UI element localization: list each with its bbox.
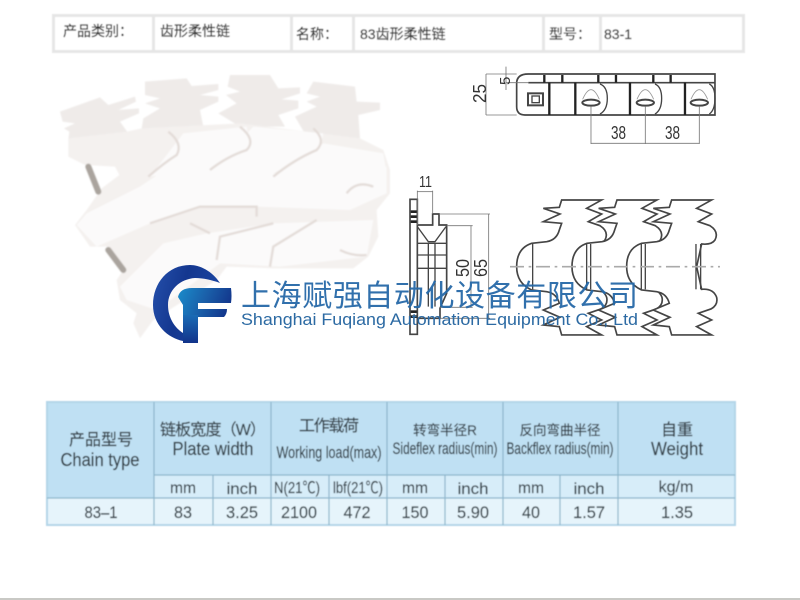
column header: sideflex radius: 转弯半径R	[413, 422, 477, 438]
column header: backflex radius: 反向弯曲半径	[520, 422, 600, 438]
column header: weight	[651, 421, 703, 459]
column header: sideflex radius: Sideflex radius(min)	[392, 439, 498, 458]
dimension label: 5: 5	[497, 77, 514, 85]
data row: 83-1: 83–1	[84, 503, 118, 522]
company logo: CF mark	[153, 265, 232, 343]
product photo: white modular chain	[60, 75, 390, 338]
dimension label: 65: 65	[471, 259, 491, 277]
label: model: 型号：	[549, 26, 591, 42]
company name in English: Shanghai Fuqiang Automation Equipment Co., Ltd	[241, 310, 638, 329]
logo F	[178, 288, 232, 343]
column header: working load: 工作载荷	[299, 417, 359, 435]
logo C	[153, 265, 220, 341]
data row: 83-1: 472	[344, 503, 370, 522]
data row: 83-1: 83	[174, 503, 192, 522]
data row: 83-1: 5.90	[457, 503, 489, 522]
data row: 83-1: 3.25	[226, 503, 258, 522]
dimension label: 38 right: 38	[665, 123, 680, 143]
dimension label: 38 left: 38	[611, 123, 626, 143]
column header: plate width: 链板宽度（W）	[160, 421, 266, 439]
column header: plate width	[160, 421, 266, 459]
dimension label: 50: 50	[453, 259, 473, 277]
chain pin rods	[88, 167, 123, 270]
link shadows	[148, 127, 373, 267]
dimension label: 25: 25	[470, 84, 490, 103]
column header: working load	[276, 417, 382, 462]
column header: chain type: Chain type	[60, 450, 140, 470]
units row: inch	[574, 481, 604, 498]
dimension drawing: end view with sprocket	[410, 191, 490, 334]
dimension drawing: plan view of three links	[510, 200, 720, 335]
value: name: 83齿形柔性链	[360, 26, 446, 42]
data row: 83-1: 2100	[281, 503, 317, 522]
column header: weight: Weight	[651, 439, 703, 459]
units row: inch	[458, 481, 488, 498]
dimension drawing: side view with 38 mm pitch	[486, 67, 715, 144]
column header: plate width: Plate width	[172, 439, 254, 459]
units row: kg/m	[658, 479, 694, 496]
units row: inch	[226, 481, 258, 498]
units row: mm	[402, 480, 428, 497]
column header: weight: 自重	[661, 421, 693, 439]
data row: 83-1: 40	[522, 503, 540, 522]
units row: N(21℃)	[274, 480, 320, 497]
parameter table	[47, 402, 735, 525]
value: model: 83-1	[604, 26, 632, 42]
column header: working load: Working load(max)	[276, 443, 382, 462]
units row: mm	[518, 480, 544, 497]
units row	[170, 479, 694, 498]
value: product category: 齿形柔性链	[160, 23, 230, 39]
column header: chain type	[60, 431, 140, 470]
column header: sideflex radius	[392, 422, 498, 458]
units row: lbf(21℃)	[333, 480, 383, 497]
column header: chain type: 产品型号	[69, 431, 133, 449]
data row: 83-1: 1.35	[661, 503, 693, 522]
dimension label: 11: 11	[419, 174, 432, 191]
label: product category: 产品类别：	[63, 23, 133, 39]
data row: 83-1: 150	[402, 503, 428, 522]
company name in Chinese: 上海赋强自动化设备有限公司	[241, 280, 638, 313]
link highlights	[77, 127, 387, 310]
top specification table	[52, 14, 745, 53]
column header: backflex radius	[506, 422, 614, 458]
data row: 83-1	[84, 503, 693, 522]
data row: 83-1: 1.57	[573, 503, 605, 522]
label: name: 名称：	[296, 26, 338, 42]
chain teeth row	[60, 75, 380, 140]
units row: mm	[170, 480, 196, 497]
column header: backflex radius: Backflex radius(min)	[506, 439, 614, 458]
chain body	[68, 123, 390, 338]
